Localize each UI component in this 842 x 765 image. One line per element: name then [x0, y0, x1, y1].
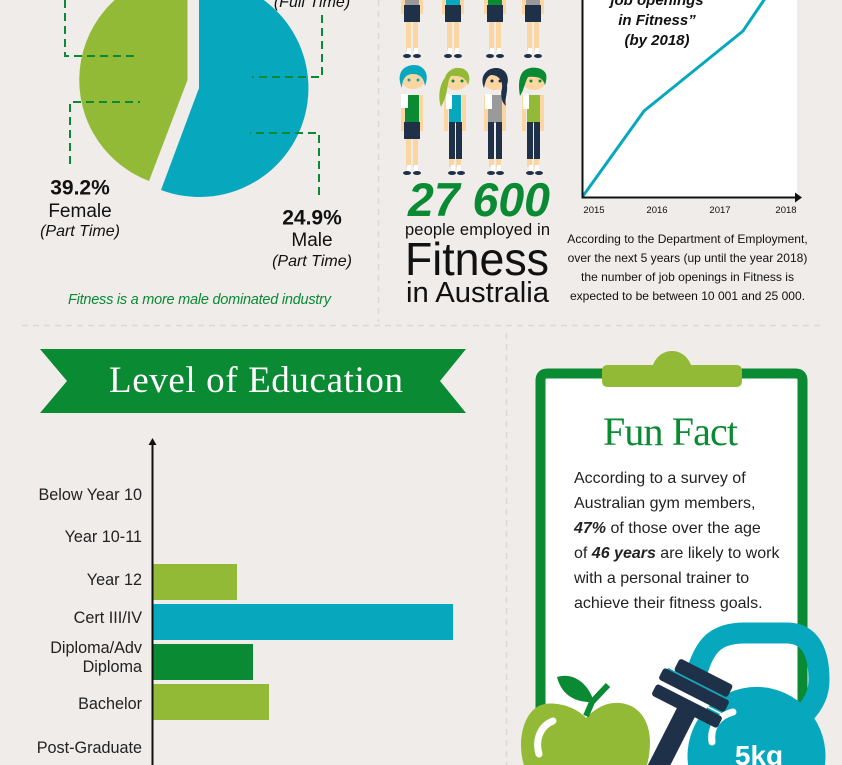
category labels: Cert III/IV: [74, 609, 142, 627]
headline: 27 600 people employed: in Australia: [406, 277, 549, 309]
person: black hair, grey top: [482, 68, 508, 175]
axis arrowhead: [795, 192, 802, 202]
fun fact text: of 46 years are likely to work: [574, 545, 780, 562]
category labels: Diploma: [83, 658, 142, 676]
chart title: (by 2018): [624, 32, 690, 49]
icon: kettlebell: [688, 633, 826, 765]
fun fact text: [573, 470, 780, 612]
x-axis year labels: 2017: [709, 205, 731, 216]
chart description: [567, 232, 808, 303]
headline: 27 600 people employed: Fitness: [405, 233, 549, 285]
bar: Bachelor: [153, 684, 269, 720]
axis arrowhead: [148, 438, 156, 445]
bar: Cert III/IV: [153, 604, 453, 640]
bar: Year 12: [153, 564, 237, 600]
icon: dumbbell: [613, 654, 738, 765]
caption: male dominated: Fitness is a more male dominated industry: [68, 292, 332, 308]
trend line: [583, 0, 766, 196]
chart title: in Fitness”: [618, 12, 696, 29]
person: green hair, blue top: [439, 68, 469, 175]
category labels: Year 10-11: [65, 528, 142, 546]
icon: apple: [521, 676, 650, 765]
x-axis year labels: 2016: [646, 205, 668, 216]
x-axis year labels: 2015: [583, 205, 605, 216]
category labels: Bachelor: [78, 695, 143, 713]
fun fact text: 47% of those over the age: [573, 520, 761, 537]
clipboard clip: [602, 351, 742, 387]
label: female part time: 39.2%: [50, 176, 110, 200]
chart axes: [582, 0, 797, 198]
chart description: over the next 5 years (up until the year 2018): [568, 251, 807, 265]
headline: 27 600 people employed: [405, 173, 550, 309]
category labels: Year 12: [87, 571, 142, 589]
panel: Fun Fact clipboard: [540, 351, 802, 765]
person: dark green hair, light green top: [519, 68, 546, 175]
pie slice: female: [79, 0, 188, 181]
heading: Fun Fact: Fun Fact: [603, 409, 738, 454]
headline: 27 600 people employed: 27 600: [407, 173, 550, 226]
category labels: [37, 486, 143, 757]
label: male part time: 24.9%: [282, 206, 342, 230]
label: female part time: [40, 176, 120, 240]
pie slice: male: [161, 0, 308, 197]
chart background: [583, 0, 797, 197]
fun fact text: Australian gym members,: [574, 495, 755, 512]
panel: people employed pictogram: [400, 0, 550, 309]
category labels: Post-Graduate: [37, 739, 142, 757]
clipboard board: [540, 374, 802, 765]
label: male part time: (Part Time): [272, 253, 352, 270]
fun fact text: achieve their fitness goals.: [574, 595, 763, 612]
panel: employment by gender pie chart: [40, 0, 352, 308]
person: blue hair, green top: [400, 65, 427, 175]
x-axis year labels: 2018: [775, 205, 797, 216]
label: female part time: (Part Time): [40, 223, 120, 240]
chart description: expected to be between 10 001 and 25 000.: [570, 289, 805, 303]
person: row 1 column 2: [442, 0, 464, 58]
bar chart: level of education: [37, 438, 453, 765]
heading: Level of Education banner: Level of Education: [109, 360, 403, 401]
callout leader lines: [65, 0, 322, 195]
chart description: According to the Department of Employment,: [567, 232, 808, 246]
label: male part time: [272, 206, 352, 270]
heading: Level of Education banner: [40, 349, 466, 413]
x-axis year labels: [583, 205, 797, 216]
chart description: the number of job openings in Fitness is: [581, 270, 794, 284]
person: row 1 column 3: [484, 0, 506, 58]
person: row 1 column 1: [401, 0, 423, 58]
chart title: [608, 0, 704, 49]
fun fact text: with a personal trainer to: [573, 570, 749, 587]
label: male part time: Male: [291, 230, 333, 251]
vertical axis: [152, 444, 154, 765]
category labels: Below Year 10: [38, 486, 142, 504]
person: row 1 column 4: [522, 0, 544, 58]
label: female part time: Female: [48, 201, 112, 222]
panel: job openings line chart: [567, 0, 808, 303]
headline: 27 600 people employed: people employed in: [405, 221, 550, 239]
bar: Diploma/Adv Diploma: [153, 644, 253, 680]
fun fact text: According to a survey of: [574, 470, 746, 487]
category labels: Diploma/Adv: [50, 639, 143, 657]
